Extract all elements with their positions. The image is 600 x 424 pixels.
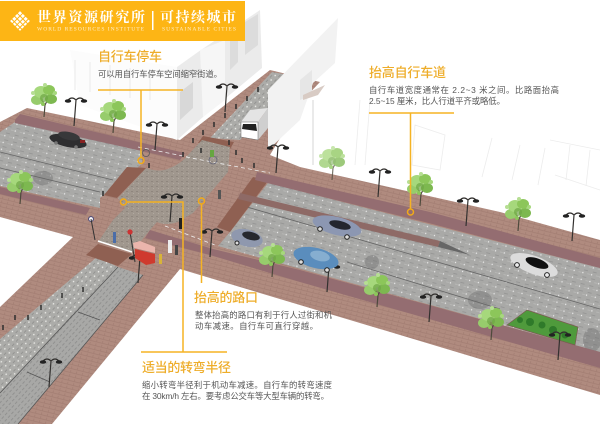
callout: turning radius: 在 30km/h 左右。要考虑公交车等大型车辆的转弯。 [142,391,329,401]
car: silver [507,248,561,282]
callout: raised intersection: 整体抬高的路口有利于行人过街和机 [195,310,333,320]
organisation name english: WORLD RESOURCES INSTITUTE [37,26,145,32]
road east [218,183,600,352]
median [238,193,440,247]
shaded facade [177,10,262,140]
car: blue [291,243,341,273]
lamps [40,84,585,387]
bike lanes [15,114,185,160]
callout: turning radius: 适当的转弯半径 [142,360,231,375]
building: translucent [268,18,338,165]
divider [152,11,154,30]
car: dark [48,130,88,151]
crosswalks [86,244,132,266]
crosswalk north [198,136,234,149]
lane lines [0,152,600,309]
logo icon [10,11,30,31]
crossing white [98,241,132,252]
programme name: 可持续城市 [160,9,236,26]
callout: raised intersection: 动车减速。自行车可直行穿越。 [195,321,318,331]
callout: turning radius [120,199,333,401]
callout: bicycle parking: 可以用自行车停车空间缩窄街道。 [98,69,222,79]
intersection [98,140,230,252]
tree shadows [33,171,600,352]
organisation name: 世界资源研究所 [37,9,145,26]
cyclist [209,156,217,164]
bollards [3,87,258,330]
side street north [210,72,300,140]
median wedge [438,241,470,255]
shrubs [517,317,568,338]
callout: bicycle parking [98,49,222,164]
header banner [0,1,245,41]
programme name english: SUSTAINABLE CITIES [162,26,236,32]
building: white corner [70,10,262,140]
callout: raised bike lane: 2.5~15 厘米，比人行道平齐或略低。 [369,96,505,106]
callout: raised bike lane [369,65,559,215]
callout: raised bike lane: 抬高自行车道 [369,65,446,80]
road west [0,122,142,208]
callout: bicycle parking: 自行车停车 [98,49,162,64]
callout: turning radius: 缩小转弯半径利于机动车减速。自行车的转弯速度 [142,380,333,390]
food stall and people [89,150,221,265]
car: blue grey [229,226,265,250]
parking strip south [0,267,143,424]
callout: raised intersection: 抬高的路口 [194,290,258,305]
van [241,108,268,140]
planter [507,310,578,345]
car: grey blue [311,211,363,241]
building outlines east [355,100,600,190]
trees [7,83,531,340]
callout: raised bike lane: 自行车道宽度通常在 2.2~3 米之间。比路面抬高 [369,85,559,95]
road side street south [0,257,118,393]
callout: raised intersection [194,198,333,331]
